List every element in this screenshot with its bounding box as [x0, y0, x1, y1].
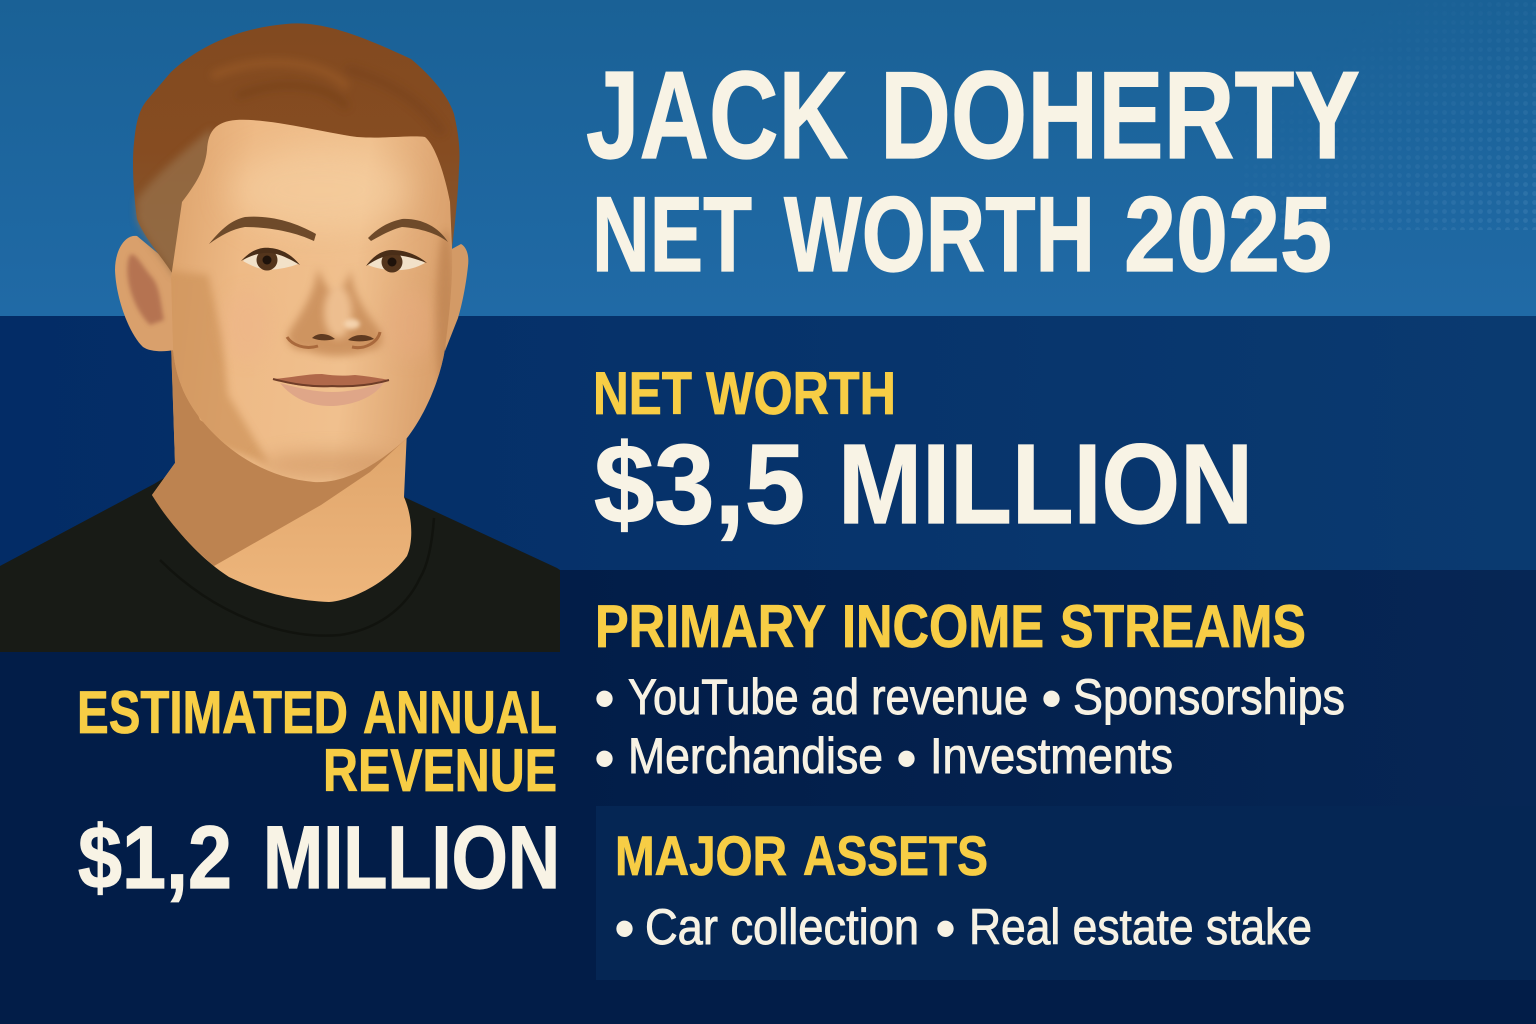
- portrait: eyebrows: [209, 217, 448, 244]
- title line 2: WORTH: [784, 174, 1095, 294]
- revenue value: MILLION: [263, 807, 560, 907]
- assets heading: [615, 824, 988, 887]
- net worth label: WORTH: [706, 360, 896, 427]
- title line 2: NET: [592, 174, 752, 294]
- panel: major assets background: [596, 806, 1536, 980]
- revenue label line 2: REVENUE: [323, 737, 557, 804]
- income line 1: [594, 665, 1345, 732]
- net worth label: NET: [593, 360, 692, 427]
- portrait: left ear: [115, 236, 178, 351]
- portrait: right ear: [445, 244, 468, 351]
- title line 1: DOHERTY: [880, 47, 1360, 185]
- portrait: nose: [287, 268, 382, 356]
- net worth label: [593, 360, 896, 427]
- income heading: STREAMS: [1060, 593, 1306, 660]
- net worth value: MILLION: [838, 421, 1253, 547]
- income line 1: Sponsorships: [1073, 669, 1345, 725]
- title line 2: [592, 174, 1332, 294]
- portrait: face shading: [165, 148, 456, 479]
- income line 1: YouTube ad revenue: [628, 669, 1028, 725]
- assets heading: MAJOR: [615, 824, 787, 887]
- portrait: right eye: [366, 250, 427, 272]
- net worth: [593, 360, 1253, 547]
- panel: income streams background: [560, 570, 1536, 806]
- portrait: t-shirt: [0, 478, 560, 652]
- assets heading: ASSETS: [803, 824, 988, 887]
- title line 2: 2025: [1124, 174, 1332, 294]
- assets line: •: [614, 895, 635, 962]
- income line 2: Investments: [930, 728, 1173, 784]
- revenue label line 1: ANNUAL: [363, 679, 557, 746]
- portrait: temple fade: [137, 128, 220, 278]
- income line 2: •: [896, 725, 917, 792]
- panel: revenue background: [0, 652, 560, 1024]
- net worth band: [0, 316, 1536, 570]
- assets line: Real estate stake: [969, 899, 1312, 955]
- portrait: neck shadow: [152, 345, 407, 566]
- estimated annual revenue: [77, 679, 560, 907]
- major assets: [614, 824, 1312, 962]
- portrait: [0, 23, 560, 652]
- portrait: hair: [133, 23, 459, 278]
- assets line: Car collection: [645, 899, 919, 955]
- income heading: PRIMARY: [595, 593, 826, 660]
- portrait: hair texture: [215, 60, 346, 86]
- title line 1: [586, 47, 1360, 185]
- income line 1: •: [1041, 665, 1062, 732]
- income line 2: Merchandise: [628, 728, 883, 784]
- income line 1: •: [594, 665, 615, 732]
- portrait: left eye: [241, 248, 300, 270]
- portrait: neck: [152, 340, 411, 602]
- revenue label line 1: ESTIMATED: [77, 679, 348, 746]
- portrait: face: [171, 120, 452, 482]
- revenue value: $1,2: [78, 807, 232, 907]
- net worth value: [594, 421, 1253, 547]
- title line 1: JACK: [586, 47, 848, 185]
- title: [586, 47, 1360, 294]
- income heading: INCOME: [842, 593, 1044, 660]
- assets line: •: [935, 895, 956, 962]
- revenue value: [78, 807, 560, 907]
- income heading: [595, 593, 1306, 660]
- portrait: mouth: [273, 374, 389, 406]
- top banner: [0, 0, 1536, 316]
- income line 2: [594, 725, 1173, 792]
- primary income streams: [594, 593, 1345, 792]
- assets line: [614, 895, 1312, 962]
- net worth value: $3,5: [594, 421, 805, 547]
- income line 2: •: [594, 725, 615, 792]
